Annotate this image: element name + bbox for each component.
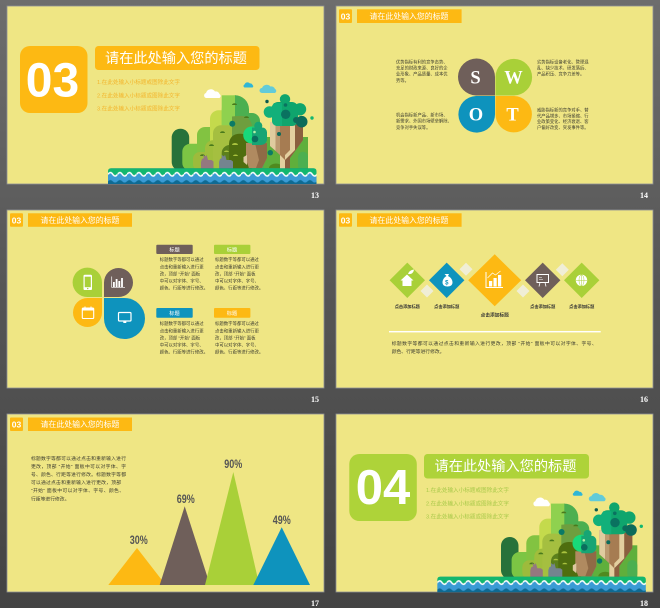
header: [339, 213, 462, 227]
small tree: [243, 122, 267, 168]
caption 3: [156, 308, 208, 356]
header: 03: [12, 215, 21, 225]
header: 03: [341, 215, 350, 225]
caption 2: 标题: [227, 245, 237, 253]
caption 3: 标题: [169, 309, 180, 317]
caption 1: 中可以对字体、字号、: [160, 278, 204, 285]
diamond labels: 点击添加标题: [434, 303, 460, 310]
caption 1: 点击和重新输入进行更: [160, 263, 204, 270]
water band: [108, 168, 316, 184]
page number 17: 17: [311, 599, 319, 608]
body text: [392, 340, 597, 355]
caption 3: 点击和重新输入进行更: [160, 327, 204, 334]
subtitle list: 2.在此处输入小标题或图除此文字: [426, 500, 509, 508]
text: weaknesses: 劣势指标设备老化、管理混: [537, 58, 589, 66]
caption 1: 标题: [169, 245, 180, 253]
text: threats: 威胁指标新的竞争对手、替: [537, 106, 589, 114]
triangle 69%: [160, 492, 210, 585]
diamond: presentation board: [525, 263, 560, 298]
text: weaknesses: [537, 58, 589, 78]
petal T: T: [506, 106, 519, 126]
diamond: money bag: $: [445, 280, 449, 286]
triangle 90%: [205, 457, 259, 585]
diamond: rising chart: [468, 254, 521, 306]
text: strengths: 优势指标有利的竞争态势、: [396, 58, 448, 66]
caption 4: 中可以对字体、字号、: [215, 342, 259, 349]
header: [10, 213, 132, 227]
text: opportunities: [396, 112, 452, 131]
number badge 03: [20, 46, 88, 113]
number badge 04: 04: [356, 461, 410, 515]
body text: 更改，顶部 “开始” 面板中可以对字体、字: [31, 463, 126, 470]
caption 2: [214, 245, 263, 292]
caption 4: 颜色、行距等进行修改。: [215, 349, 263, 356]
donkeys: [201, 155, 233, 169]
body text: “开始” 面板中可以对字体、字号、颜色、: [31, 487, 124, 494]
illustration: forest hills, trees and water: [108, 82, 316, 184]
page number 13: 13: [311, 191, 319, 200]
petal: calendar: [73, 298, 102, 327]
text: opportunities: 新需求、外国市场壁垒解除、: [396, 118, 452, 124]
page number 14: 14: [640, 191, 648, 200]
diamond labels: 点击添加标题: [530, 303, 556, 310]
diamond labels: 点击添加标题: [395, 303, 421, 310]
diamond labels: 点击添加标题: [569, 303, 595, 310]
subtitle list: 3.在此处输入小标题或图除此文字: [97, 104, 180, 112]
body text: [31, 455, 126, 502]
slide 18: section 04 cover: [336, 414, 653, 608]
caption 4: [214, 308, 263, 356]
page number 15: 15: [311, 395, 319, 404]
header: 请在此处输入您的标题: [41, 215, 120, 225]
number badge 03: 03: [26, 54, 79, 108]
caption 2: 颜色、行距等进行修改。: [215, 285, 263, 292]
triangle 30%: [108, 533, 166, 585]
body text: 行距等进行修改。: [31, 496, 69, 502]
text: threats: 业政策变化、经济衰退、客: [537, 118, 589, 125]
body text: 标题数字等都可以通过点击和重新输入进行: [31, 455, 126, 462]
subtitle list: [97, 78, 180, 112]
petal O: O: [469, 106, 483, 126]
text: strengths: 业形象、产品质量、成本优: [396, 70, 448, 78]
caption 3: 中可以对字体、字号、: [160, 342, 204, 349]
section title bar: [424, 454, 589, 478]
diamond labels: [395, 303, 595, 318]
slide 14: SWOT: [336, 6, 653, 200]
petal: phone: [73, 268, 102, 297]
petal: bar chart: [104, 268, 133, 297]
subtitle list: 2.在此处输入小标题或图除此文字: [97, 92, 180, 100]
petal S: S: [470, 68, 481, 88]
section title bar: 请在此处输入您的标题: [105, 50, 247, 67]
clouds: [204, 82, 276, 98]
petal W: W: [504, 68, 523, 88]
body text: 标题数字等都可以通过点击和重新输入进行更改，顶部 “开始” 面板中可以对字体、字号、: [392, 340, 597, 347]
text: threats: [537, 106, 589, 131]
slide 16: diamonds: [336, 210, 653, 404]
body text: 颜色、行距等进行修改。: [392, 348, 444, 355]
caption 3: 标题数字等都可以通过: [160, 320, 204, 327]
text: weaknesses: 产品积压、竞争力差等。: [537, 70, 584, 78]
header: 请在此处输入您的标题: [41, 419, 120, 429]
caption 2: 标题数字等都可以通过: [215, 256, 260, 263]
diamond labels: 点击添加标题: [481, 312, 509, 318]
body text: 号、颜色、行距等进行修改。标题数字等都: [31, 471, 126, 478]
header: [10, 418, 132, 431]
diamond: money bag: [429, 263, 464, 298]
caption 3: 颜色、行距等进行修改。: [160, 349, 208, 356]
caption 4: 标题: [227, 309, 237, 317]
subtitle list: 1.在此处输入小标题或图除此文字: [97, 78, 180, 86]
text: strengths: 充足的财政来源、良好的企: [396, 64, 448, 72]
subtitle list: [426, 486, 509, 520]
subtitle list: 3.在此处输入小标题或图除此文字: [426, 512, 509, 520]
text: strengths: 势等。: [396, 77, 409, 84]
text: threats: 户偏好改变、突发事件等。: [537, 124, 589, 131]
page number 16: 16: [640, 395, 648, 404]
slide 15: four petals with captions: [7, 210, 324, 404]
slide 17: triangle chart: [7, 414, 324, 608]
caption 1: 标题数字等都可以通过: [160, 256, 204, 263]
caption 3: 改，顶部 “开始” 面板: [160, 334, 201, 341]
slide 13: section 03 cover: [7, 6, 324, 200]
header: 请在此处输入您的标题: [370, 215, 449, 225]
header: 03: [12, 420, 21, 430]
text: opportunities: 竞争对手失误等。: [396, 124, 430, 131]
text: opportunities: 机会指标新产品、新市场、: [396, 112, 448, 118]
caption 1: 颜色、行距等进行修改。: [160, 285, 208, 292]
triangle 49%: [253, 513, 310, 585]
diamond: globe: [564, 263, 599, 298]
caption 2: 中可以对字体、字号、: [215, 278, 259, 285]
petal: monitor: [104, 298, 145, 339]
illustration: forest hills, trees and water: [437, 491, 646, 592]
caption 1: [156, 245, 208, 292]
triangle 49%: 49%: [273, 513, 291, 527]
number badge 04: [349, 454, 417, 521]
triangle 30%: 30%: [130, 533, 148, 547]
text: weaknesses: 乱、缺少技术、研发落后、: [537, 64, 589, 72]
text: strengths: [396, 58, 448, 84]
subtitle list: 1.在此处输入小标题或图除此文字: [426, 486, 509, 494]
header: 03: [341, 11, 350, 21]
section title bar: 请在此处输入您的标题: [435, 458, 576, 475]
header: [339, 9, 462, 23]
triangle 69%: 69%: [177, 492, 195, 506]
caption 2: 改，顶部 “开始” 面板: [215, 270, 256, 277]
diamond: home: [390, 263, 425, 298]
caption 2: 点击和重新输入进行更: [215, 263, 260, 270]
caption 4: 点击和重新输入进行更: [215, 327, 260, 334]
page number 18: 18: [640, 599, 648, 608]
header: 请在此处输入您的标题: [370, 11, 449, 21]
SWOT petals: [458, 59, 532, 133]
triangle 90%: 90%: [224, 457, 243, 471]
caption 4: 标题数字等都可以通过: [215, 320, 260, 327]
caption 1: 改，顶部 “开始” 面板: [160, 270, 201, 277]
section title bar: [95, 46, 260, 70]
text: threats: 代产品增多、市场紧缩、行: [537, 112, 589, 120]
body text: 可以通过点击和重新输入进行更改，顶部: [31, 479, 121, 486]
caption 4: 改，顶部 “开始” 面板: [215, 334, 256, 341]
big tree: [264, 94, 308, 170]
pale connector diamonds: [420, 263, 569, 298]
